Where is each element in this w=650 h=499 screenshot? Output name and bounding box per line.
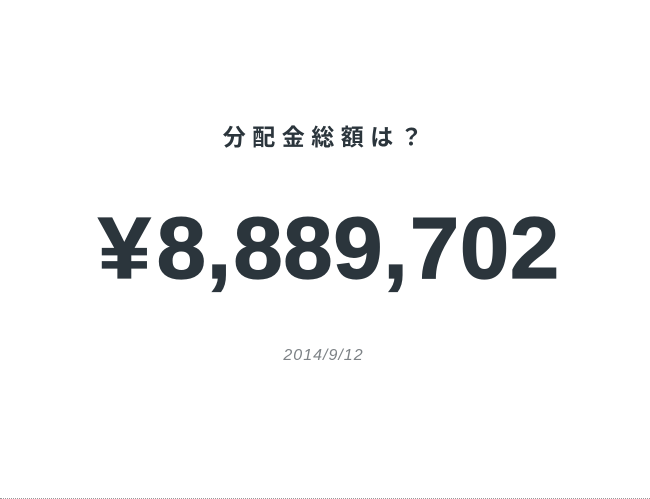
heading: 分配金総額は？	[223, 124, 429, 150]
total amount: ¥	[98, 200, 151, 297]
total amount: 8,889,702	[157, 200, 560, 297]
date: 2014/9/12	[283, 347, 364, 364]
